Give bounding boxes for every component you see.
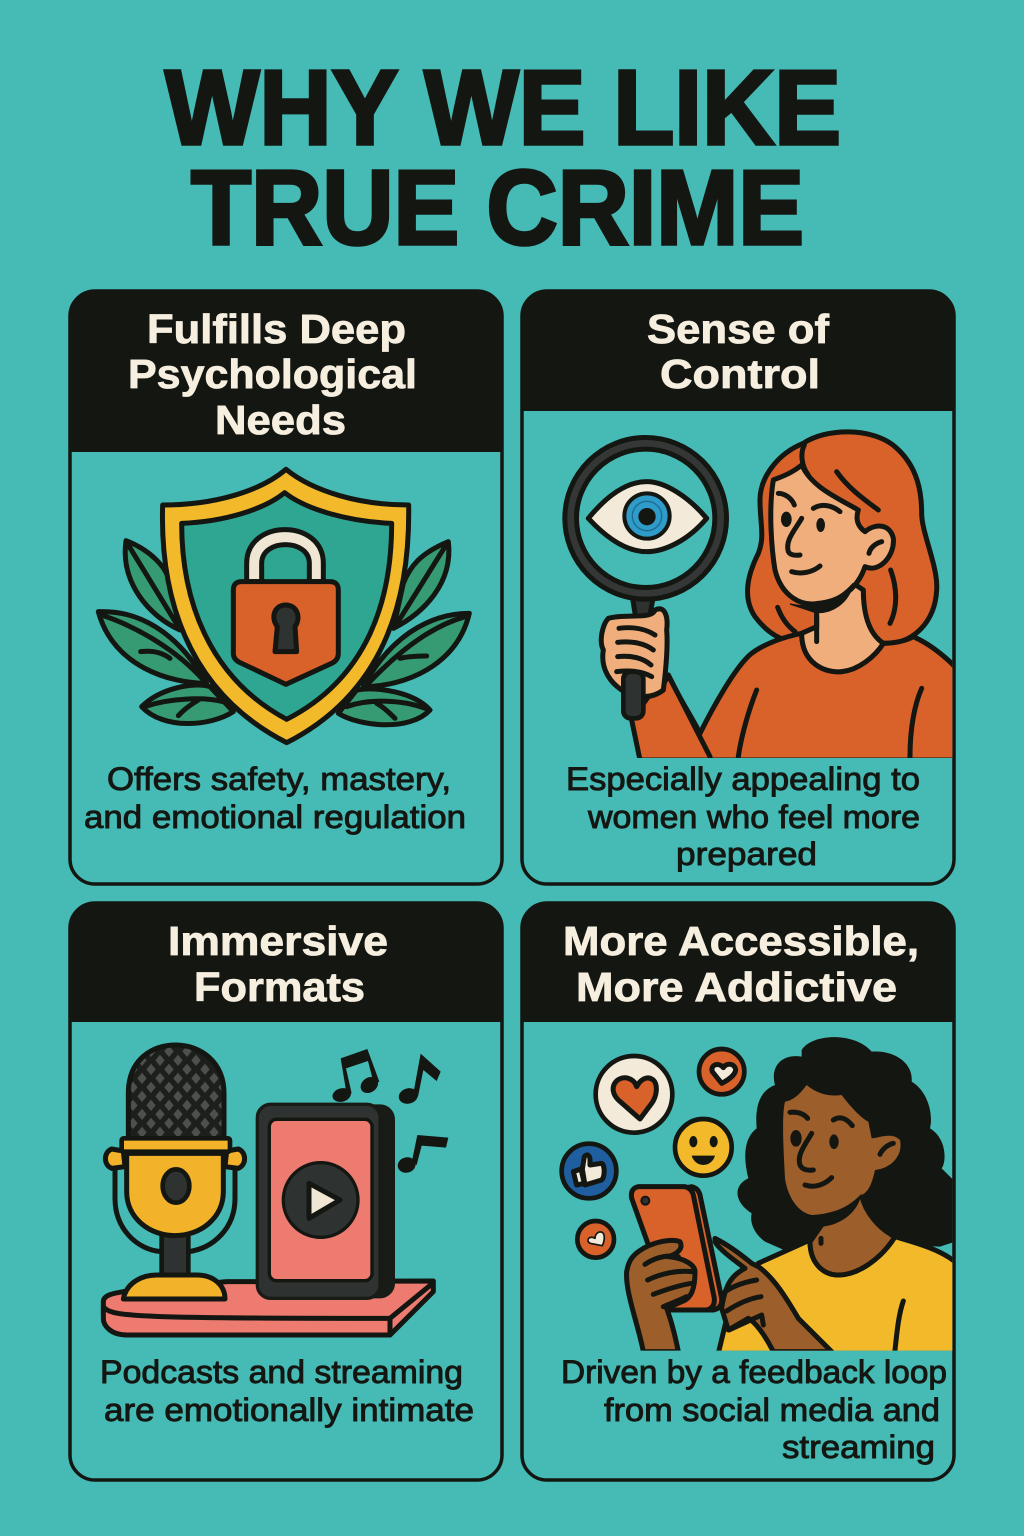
woman: hair — [737, 1037, 955, 1253]
woman: shirt — [718, 1237, 955, 1353]
woman: details — [790, 1112, 903, 1350]
panel: sense of control — [522, 291, 955, 884]
icon: shield — [162, 469, 409, 743]
text: driven by a feedback loop: Driven by a feedback loop — [561, 1354, 947, 1390]
icon: leaves — [98, 541, 469, 725]
panel header: more accessible, more addictive: More Accessible, — [563, 918, 919, 964]
panel header: sense of control: Control — [660, 351, 820, 397]
music notes — [331, 1049, 448, 1175]
hand holding handle — [601, 609, 667, 718]
panel: more accessible, more addictive — [522, 903, 955, 1480]
woman: neck — [810, 1195, 895, 1275]
panel header: more accessible, more addictive — [522, 903, 954, 1022]
reaction: thumbs up — [562, 1144, 616, 1198]
text: especially appealing — [566, 761, 920, 872]
icon: woman with phone and social reactions — [562, 1037, 955, 1353]
woman: details — [668, 445, 922, 757]
magnifying glass — [571, 443, 721, 623]
tablet with play button — [257, 1104, 395, 1298]
woman: hair — [748, 432, 937, 643]
icon: shield with padlock and leaves — [98, 469, 469, 743]
text: especially appealing: Especially appealing to — [566, 761, 920, 797]
panel header: fulfills deep psychological needs: Psychological — [128, 351, 417, 397]
text: podcasts and streaming — [100, 1354, 474, 1428]
text: podcasts and streaming: Podcasts and streaming — [100, 1354, 463, 1390]
text: offers safety: Offers safety, mastery, — [107, 761, 451, 797]
reaction: small heart — [699, 1049, 744, 1094]
panel header: immersive formats — [70, 903, 502, 1022]
title: TRUE CRIME — [191, 149, 804, 267]
shelf — [103, 1281, 433, 1335]
text: driven by a feedback loop: streaming — [782, 1429, 935, 1465]
icon: microphone, tablet and music notes — [103, 1042, 448, 1335]
eye — [588, 482, 707, 552]
reaction: small heart lower — [577, 1221, 614, 1258]
panel header: more accessible, more addictive: More Addictive — [576, 964, 897, 1010]
panel: immersive formats — [70, 903, 502, 1480]
title: WHY WE LIKE — [165, 49, 841, 167]
panel header: fulfills deep psychological needs — [70, 291, 502, 452]
reaction: heart — [596, 1056, 672, 1133]
panel header: fulfills deep psychological needs: Needs — [215, 397, 346, 443]
right hand — [715, 1238, 832, 1352]
text: offers safety: and emotional regulation — [84, 799, 466, 835]
icon: woman with magnifying glass and eye — [571, 432, 955, 760]
title — [165, 49, 841, 267]
reaction: smiley — [675, 1119, 732, 1176]
woman: face — [771, 465, 893, 604]
woman: sweater — [632, 633, 955, 760]
text: especially appealing: prepared — [676, 836, 817, 872]
panel header: sense of control: Sense of — [647, 306, 829, 352]
panel header: immersive formats: Immersive — [168, 918, 388, 964]
phone — [631, 1187, 722, 1310]
panel header: immersive formats: Formats — [194, 964, 365, 1010]
panel header: fulfills deep psychological needs: Fulfills Deep — [147, 306, 406, 352]
panel: fulfills deep psychological needs — [70, 291, 502, 884]
text: driven by a feedback loop — [561, 1354, 947, 1465]
text: especially appealing: women who feel more — [587, 799, 920, 835]
panel header: sense of control — [522, 291, 954, 411]
text: podcasts and streaming: are emotionally intimate — [104, 1392, 474, 1428]
woman: face — [783, 1085, 901, 1215]
microphone — [105, 1042, 245, 1299]
icon: padlock — [233, 530, 338, 684]
text: offers safety — [84, 761, 466, 835]
woman: neck — [802, 583, 883, 672]
text: driven by a feedback loop: from social media and — [604, 1392, 940, 1428]
left hand — [627, 1240, 695, 1352]
